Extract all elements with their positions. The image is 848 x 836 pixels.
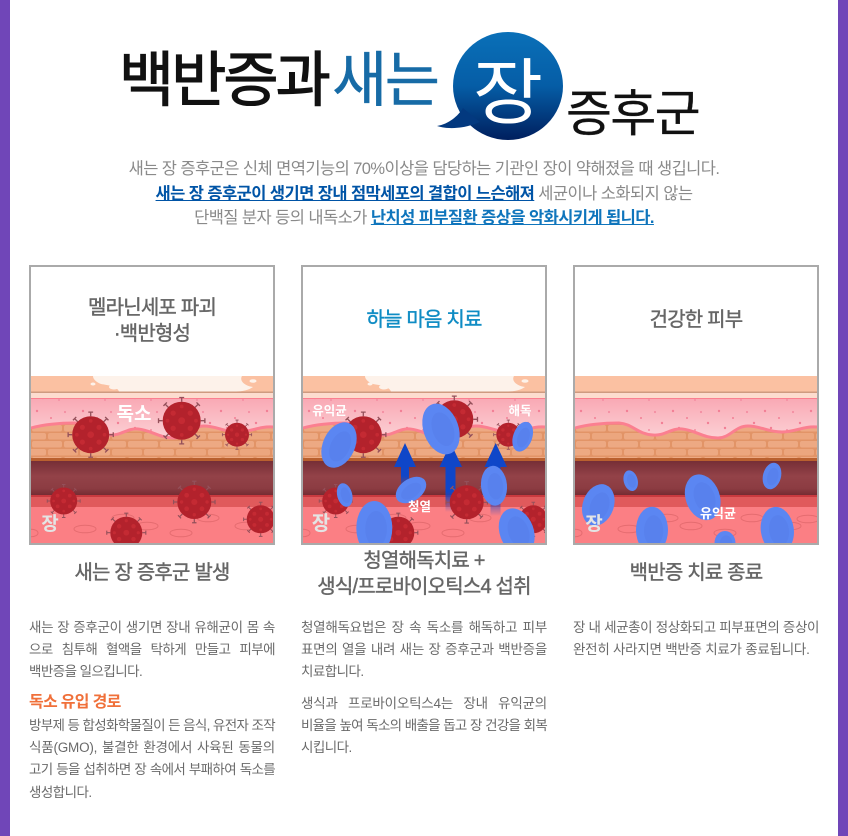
text block: panel 2 second paragraph bbox=[301, 696, 548, 755]
text block: panel 1 description: 으로 침투해 혈액을 탁하게 만들고 피부에 bbox=[29, 642, 275, 657]
illustration: beneficial bacteria and detox arrows bbox=[303, 376, 545, 543]
caption: panel 2 bbox=[317, 550, 531, 598]
toxin viruses bbox=[319, 396, 550, 552]
panel heading bbox=[88, 297, 216, 345]
text block: panel 2 first paragraph bbox=[301, 620, 547, 679]
text block: panel 2 second paragraph: 생식과 프로바이오틱스4는 장내 유익균의 bbox=[301, 696, 547, 711]
text block: panel 3 description: 장 내 세균총이 정상화되고 피부표면의 증상이 bbox=[573, 620, 819, 635]
illustration: healthy skin and gut bbox=[575, 376, 817, 543]
skin and gut layers bbox=[24, 376, 275, 543]
caption: panel 2: 생식/프로바이오틱스4 섭취 bbox=[317, 576, 531, 598]
illustration: toxins in skin and gut bbox=[31, 376, 273, 543]
caption: panel 2: 청열해독치료 + bbox=[363, 550, 485, 572]
caption: panel 1: 새는 장 증후군 발생 bbox=[74, 562, 230, 584]
icon: speech bubble with the character for gut: 장 bbox=[473, 53, 543, 134]
arrow: left detox arrow bbox=[394, 443, 416, 490]
arrow: right detox arrow bbox=[484, 443, 507, 516]
text block: panel 2 second paragraph: 비율을 높여 독소의 배출을 돕고 장 건강을 회복 bbox=[301, 718, 547, 733]
label: beneficial bacteria: 유익균 bbox=[312, 404, 347, 418]
panel heading: 하늘 마음 치료 bbox=[366, 309, 482, 331]
text block: panel 1 description bbox=[29, 620, 275, 679]
title: black words: 백반증과 bbox=[119, 47, 328, 114]
text block: toxin entry route: 식품(GMO), 불결한 환경에서 사육된 동물의 bbox=[29, 740, 275, 755]
intro text block: 새는 장 증후군이 생기면 장내 점막세포의 결합이 느슨해져 세균이나 소화되지 않는 bbox=[156, 184, 692, 202]
text block: panel 2 second paragraph: 시킵니다. bbox=[301, 740, 352, 755]
text block: toxin entry route: 방부제 등 합성화학물질이 든 음식, 유전자 조작 bbox=[29, 718, 275, 733]
beneficial bacteria bbox=[314, 398, 541, 560]
text block: panel 3 description: 완전히 사라지면 백반증 치료가 종료됩니다. bbox=[573, 642, 810, 657]
text block: toxin entry route: 고기 등을 섭취하면 장 속에서 부패하여 독소를 bbox=[29, 762, 275, 777]
text block: panel 2 first paragraph: 청열해독요법은 장 속 독소를 해독하고 피부 bbox=[301, 620, 547, 635]
text block: panel 2 first paragraph: 치료합니다. bbox=[301, 664, 364, 679]
text block: toxin entry route: 생성합니다. bbox=[29, 785, 92, 800]
caption: panel 3: 백반증 치료 종료 bbox=[630, 562, 762, 584]
label: toxin: 독소 bbox=[117, 404, 151, 425]
panel heading: 건강한 피부 bbox=[650, 309, 742, 331]
label: beneficial bacteria: 유익균 bbox=[700, 506, 736, 521]
label: clearing heat: 청열 bbox=[408, 499, 431, 514]
panel: 하늘 마음 치료 bbox=[301, 265, 547, 545]
intro text block: 단백질 분자 등의 내독소가 난치성 피부질환 증상을 악화시키게 됩니다. bbox=[194, 209, 654, 227]
beneficial bacteria bbox=[576, 461, 797, 555]
icon: speech bubble with the character for gut bbox=[437, 32, 563, 140]
text block: toxin entry route bbox=[29, 718, 276, 800]
skin and gut layers bbox=[296, 376, 547, 543]
intro text block: 새는 장 증후군은 신체 면역기능의 70%이상을 담당하는 기관인 장이 약해졌을 때 생깁니다. bbox=[129, 160, 719, 178]
arrow: middle detox arrow bbox=[440, 443, 462, 512]
text block: panel 3 description bbox=[573, 620, 819, 657]
panel: 멜라닌세포 파괴 bbox=[29, 265, 275, 545]
title bbox=[119, 32, 699, 142]
right purple edge bar bbox=[838, 0, 848, 836]
panel: 건강한 피부 bbox=[573, 265, 819, 545]
panel heading: 멜라닌세포 파괴 bbox=[88, 297, 216, 319]
text block: panel 1 description: 백반증을 일으킵니다. bbox=[29, 664, 142, 679]
toxin viruses bbox=[47, 398, 278, 552]
title: syndrome word: 증후군 bbox=[566, 86, 699, 142]
title: blue words: 새는 bbox=[332, 47, 437, 114]
label: detox: 해독 bbox=[508, 403, 532, 418]
text block: panel 2 first paragraph: 표면의 열을 내려 새는 장 증후군과 백반증을 bbox=[301, 642, 547, 657]
label: gut: 장 bbox=[312, 512, 330, 535]
panel heading: ·백반형성 bbox=[114, 323, 190, 345]
label: gut: 장 bbox=[41, 513, 59, 535]
text block: panel 1 description: 새는 장 증후군이 생기면 장내 유해균이 몸 속 bbox=[29, 620, 275, 635]
intro text block bbox=[129, 160, 719, 227]
left purple edge bar bbox=[0, 0, 10, 836]
label: gut: 장 bbox=[585, 513, 603, 535]
skin and gut layers bbox=[568, 376, 819, 543]
subheading: toxin entry route: 독소 유입 경로 bbox=[29, 694, 121, 711]
